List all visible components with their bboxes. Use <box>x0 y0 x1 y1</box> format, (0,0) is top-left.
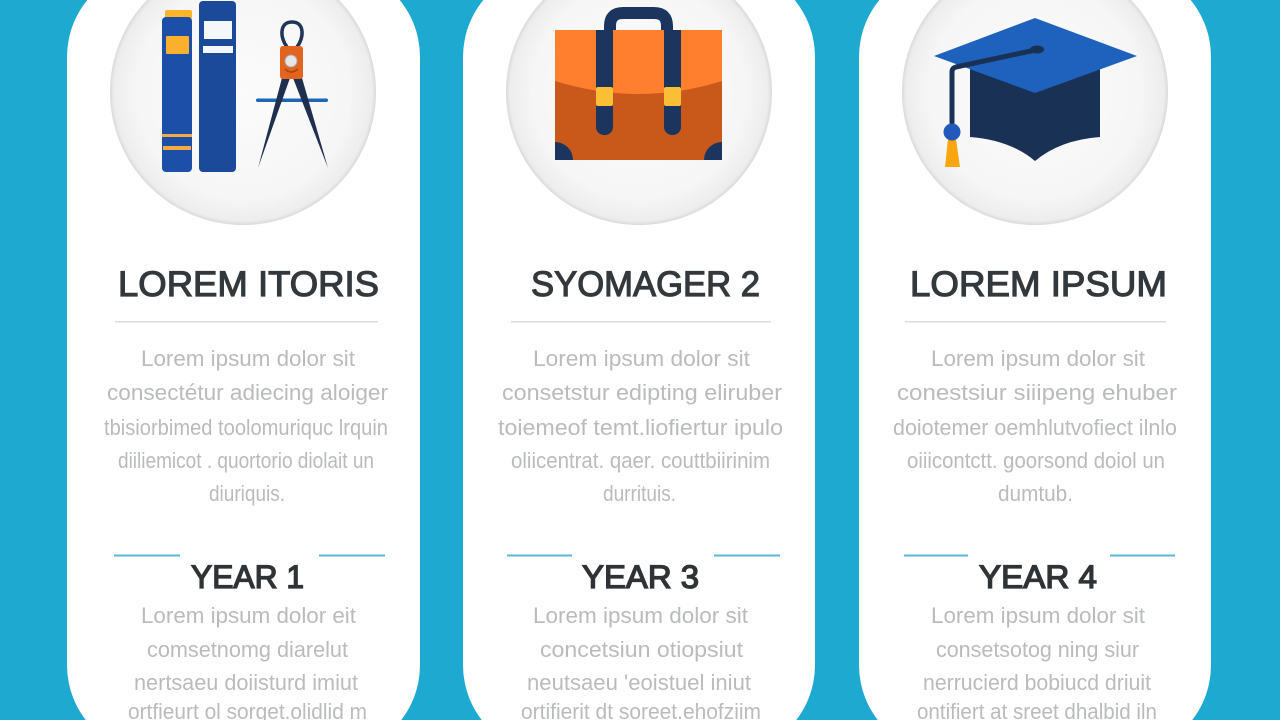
text block: description: doiotemer oemhlutvofiect ilnlo <box>893 415 1177 440</box>
text block: description: toiemeof temt.liofiertur ipulo <box>498 415 783 440</box>
heading: LOREM ITORIS <box>118 265 379 304</box>
text block: year detail: nertsaeu doiisturd imiut <box>134 670 358 695</box>
text block: description: conestsiur siiipeng ehuber <box>897 380 1177 405</box>
text block: year detail: Lorem ipsum dolor sit <box>533 603 748 628</box>
text block: year detail <box>128 603 367 720</box>
text block: description: durrituis. <box>603 481 676 506</box>
text block: description <box>498 346 783 506</box>
year label: YEAR 1 <box>191 559 304 595</box>
text block: year detail: comsetnomg diarelut <box>147 637 348 662</box>
icon: graduation cap <box>934 18 1137 167</box>
heading: SYOMAGER 2 <box>531 265 760 304</box>
text block: description: diuriquis. <box>209 481 285 506</box>
text block: year detail: neutsaeu 'eoistuel iniut <box>527 670 751 695</box>
text block: description: tbisiorbimed toolomuriquc lrquin <box>104 415 388 440</box>
icon: briefcase <box>555 13 722 160</box>
card 1 <box>67 0 420 720</box>
icon circle 2 <box>506 0 772 225</box>
text block: year detail: Lorem ipsum dolor eit <box>141 603 356 628</box>
text block: description: diiliemicot . quortorio diolait un <box>118 448 374 473</box>
text block: description <box>893 346 1177 506</box>
text block: description: dumtub. <box>998 481 1073 506</box>
panel: year 1 <box>67 0 420 720</box>
icon: books and compass <box>162 1 328 172</box>
text block: year detail <box>917 603 1157 720</box>
text block: description: Lorem ipsum dolor sit <box>533 346 750 371</box>
text block: description: oiiicontctt. goorsond doiol un <box>907 448 1165 473</box>
icon circle 3 <box>902 0 1168 225</box>
text block: year detail: consetsotog ning siur <box>936 637 1139 662</box>
text block: description <box>104 346 388 506</box>
text block: description: oliicentrat. qaer. couttbiirinim <box>511 448 770 473</box>
icon circle 1 <box>110 0 376 225</box>
text block: description: Lorem ipsum dolor sit <box>931 346 1145 371</box>
panel: year 4 <box>859 0 1211 720</box>
text block: year detail: Lorem ipsum dolor sit <box>931 603 1145 628</box>
panel: year 3 <box>463 0 815 720</box>
text block: description: consectétur adiecing aloiger <box>107 380 388 405</box>
text block: year detail <box>521 603 761 720</box>
heading: LOREM IPSUM <box>910 265 1167 304</box>
card 2 <box>463 0 815 720</box>
text block: year detail: concetsiun otiopsiut <box>540 637 743 662</box>
year label: YEAR 3 <box>582 559 699 595</box>
year label: YEAR 4 <box>979 559 1097 595</box>
text block: year detail: nerrucierd bobiucd driuit <box>923 670 1151 695</box>
card 3 <box>859 0 1211 720</box>
text block: description: consetstur edipting eliruber <box>502 380 782 405</box>
text block: description: Lorem ipsum dolor sit <box>141 346 355 371</box>
